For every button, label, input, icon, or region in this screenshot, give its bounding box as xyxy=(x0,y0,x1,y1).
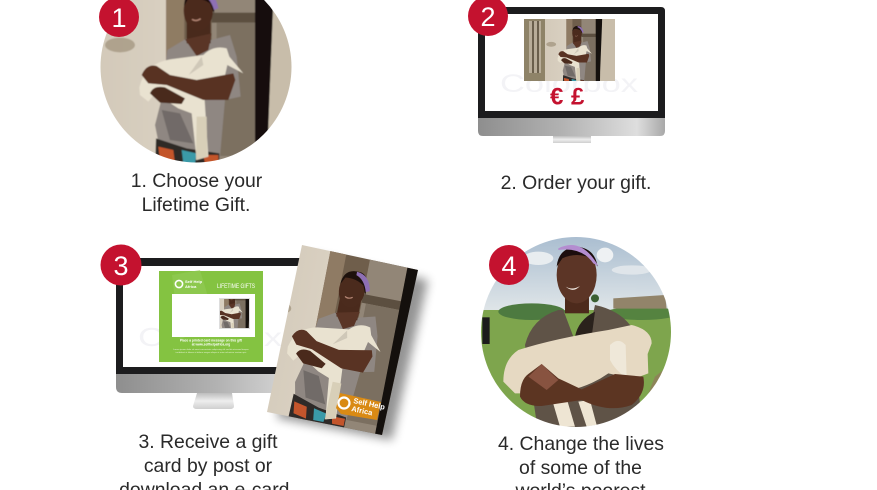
photo: smiling woman with goat in field xyxy=(481,237,671,427)
caption: step 3: 3. Receive a gift xyxy=(138,431,278,453)
printed card shadow xyxy=(277,255,428,440)
caption: step 4 xyxy=(498,433,664,490)
badge: number 4 xyxy=(489,245,529,285)
caption: step 4: of some of the xyxy=(519,457,642,479)
step 1: photo circle and badge xyxy=(99,0,292,162)
badge: number 4: 4 xyxy=(501,251,517,281)
photo: woman holding goat xyxy=(100,0,292,162)
card logo: orange Self Help Africa xyxy=(336,393,386,420)
caption: step 3 xyxy=(119,431,295,490)
watermark: Colorbox xyxy=(500,70,639,98)
e-card message: incididunt ut labore et dolore magna aliqua ut enim ad minim veniam quis xyxy=(176,351,247,354)
e-card message: at www.selfhelpafrica.org xyxy=(192,342,230,346)
caption: step 1: Lifetime Gift. xyxy=(142,194,250,216)
monitor body xyxy=(116,258,340,393)
badge: number 1: 1 xyxy=(111,3,127,33)
badge: number 1 xyxy=(99,0,139,37)
watermark: Colorbox xyxy=(138,322,282,352)
step 4: photo circle and badge xyxy=(481,237,671,427)
monitor stand xyxy=(193,393,234,409)
caption: step 2: 2. Order your gift. xyxy=(501,172,651,194)
caption: step 1 xyxy=(131,170,263,216)
monitor stand xyxy=(553,136,591,143)
badge: number 3: 3 xyxy=(113,251,129,281)
logo: Self Help Africa xyxy=(175,279,203,289)
card logo: orange Self Help Africa: Self Help xyxy=(353,396,386,412)
photo: product thumbnail xyxy=(524,19,615,81)
step 3: monitor with e-card and printed card xyxy=(100,244,433,445)
currency symbols: € xyxy=(550,84,563,110)
currency symbols: £ xyxy=(571,84,585,110)
caption: step 4: 4. Change the lives xyxy=(498,433,664,455)
logo: Self Help Africa: Self Help xyxy=(185,279,203,284)
caption: step 1: 1. Choose your xyxy=(131,170,263,192)
badge: number 3 xyxy=(100,244,142,286)
card logo: orange Self Help Africa: Africa xyxy=(351,404,374,418)
printed gift card xyxy=(267,245,418,435)
lifetime gifts heading: LIFETIME GIFTS xyxy=(217,283,255,290)
currency symbols xyxy=(550,84,585,110)
badge: number 2 xyxy=(468,0,508,36)
caption: step 3: card by post or xyxy=(144,455,273,477)
e-card message: Place a printed card message on this gift xyxy=(180,338,243,342)
e-card photo xyxy=(220,299,249,328)
logo: Self Help Africa: Africa xyxy=(185,284,197,289)
step 2: desktop monitor with order screen xyxy=(468,0,665,143)
e-card message xyxy=(173,338,249,354)
monitor body xyxy=(478,7,665,136)
e-card xyxy=(159,270,263,362)
e-card message: Lorem ipsum dolor sit amet consectetur adipiscing elit sed do eiusmod tempor xyxy=(173,348,249,351)
badge: number 2: 2 xyxy=(480,2,496,32)
